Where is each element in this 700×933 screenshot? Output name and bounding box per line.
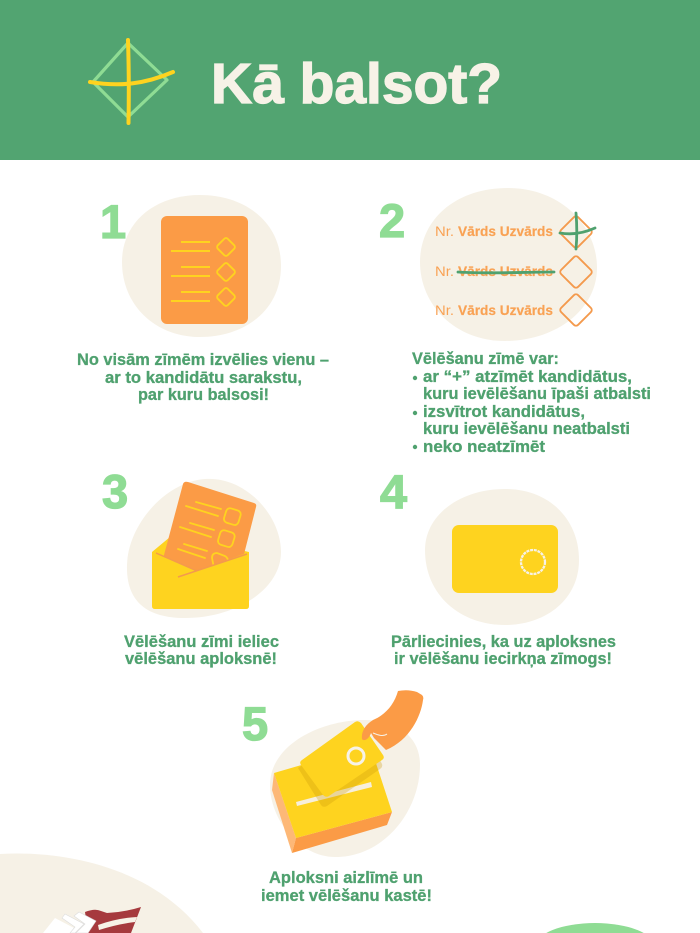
- ballot rows: Vārds Uzvārds: [458, 302, 553, 318]
- green cross and strike: [458, 213, 595, 273]
- icon: ballot paper: [161, 216, 248, 324]
- step 4 caption: [391, 633, 616, 668]
- step 5 caption: iemet vēlēšanu kastē!: [261, 887, 432, 905]
- step 2 caption: [412, 350, 651, 456]
- ballot rows: Nr.: [435, 302, 454, 318]
- step 5 caption: [261, 869, 432, 905]
- icon: ballot box and hand: [272, 690, 423, 853]
- blob 4: [425, 489, 579, 625]
- ballot rows: Nr.: [435, 223, 454, 239]
- step 1 caption: No visām zīmēm izvēlies vienu –: [77, 351, 329, 369]
- step 1 caption: par kuru balsosi!: [138, 386, 269, 404]
- step 2 panel: [379, 188, 651, 456]
- step 3 caption: Vēlēšanu zīmi ieliec: [124, 633, 279, 651]
- number 5: 5: [242, 697, 268, 750]
- step 4 caption: Pārliecinies, ka uz aploksnes: [391, 633, 616, 651]
- ballot rows: Nr.: [435, 263, 454, 279]
- step 4 caption: ir vēlēšanu iecirkņa zīmogs!: [394, 650, 612, 668]
- blob 5: [270, 720, 420, 857]
- step 2 caption: Vēlēšanu zīmē var:: [412, 350, 559, 368]
- ballot rows: Vārds Uzvārds: [458, 223, 553, 239]
- bottom left blob with flag: [0, 854, 203, 933]
- icon: envelope with ballot: [152, 482, 256, 609]
- header band: [0, 0, 700, 160]
- icon: ballots: [43, 912, 96, 933]
- step 5 caption: Aploksni aizlīmē un: [269, 869, 423, 887]
- step 2 caption: kuru ievēlēšanu neatbalsti: [423, 420, 630, 438]
- step 1 caption: [77, 351, 329, 404]
- step 2 caption: ar “+” atzīmēt kandidātus,: [423, 368, 632, 386]
- ballot rows: Vārds Uzvārds: [458, 263, 553, 279]
- step 3 caption: vēlēšanu aploksnē!: [125, 650, 277, 668]
- step 2 caption: neko neatzīmēt: [423, 438, 546, 456]
- ballot rows: [435, 213, 595, 327]
- step 3 panel: [102, 465, 281, 668]
- number 1: 1: [100, 195, 126, 248]
- step 2 caption: kuru ievēlēšanu īpaši atbalsti: [423, 385, 651, 403]
- title: Kā balsot?: [211, 52, 502, 116]
- number 2: 2: [379, 194, 405, 247]
- step 5 panel: [242, 690, 432, 905]
- number 3: 3: [102, 465, 128, 518]
- blob 2: [420, 188, 597, 341]
- white stripe: [98, 917, 137, 930]
- bottom right green blob: [535, 923, 655, 933]
- icon: stamped envelope: [452, 525, 558, 593]
- step 3 caption: [124, 633, 279, 668]
- icon: marked diamond: [90, 40, 173, 123]
- blob 3: [127, 479, 281, 618]
- step 4 panel: [380, 465, 616, 668]
- number 4: 4: [380, 465, 407, 518]
- icon: Latvian flag: [85, 907, 141, 933]
- step 1 panel: [77, 195, 329, 404]
- blob 1: [122, 195, 281, 337]
- step 2 caption: izsvītrot kandidātus,: [423, 403, 585, 421]
- step 1 caption: ar to kandidātu sarakstu,: [105, 369, 302, 387]
